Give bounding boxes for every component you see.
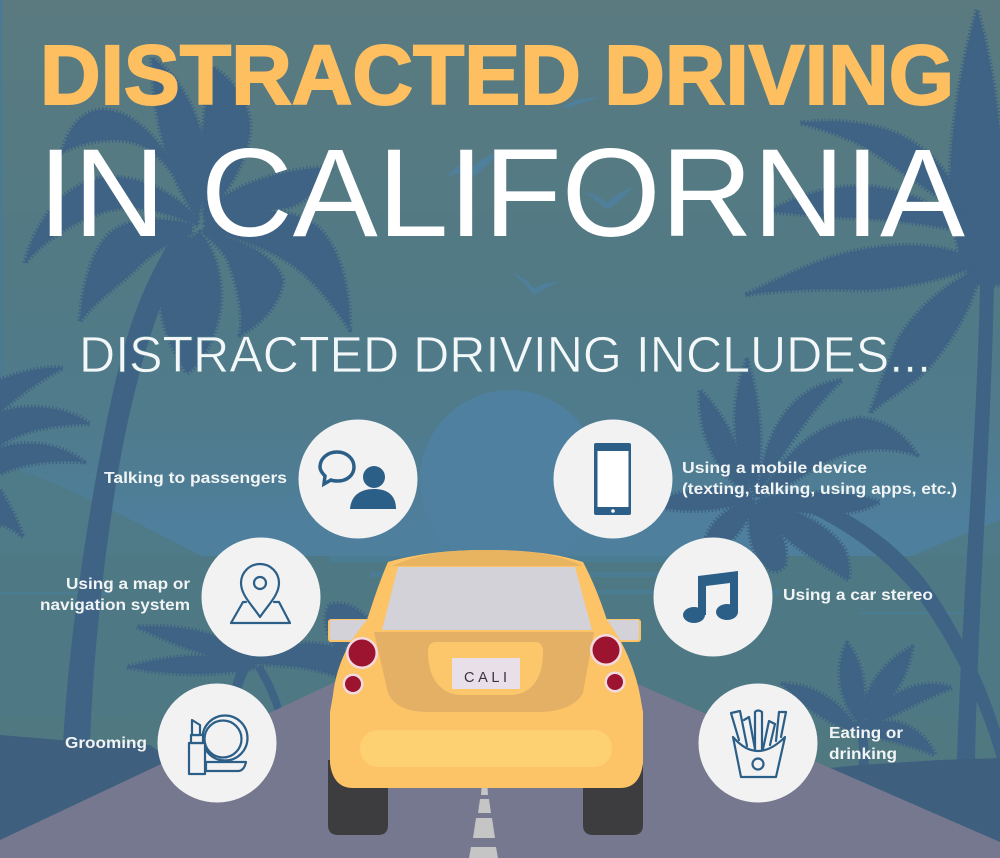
- sea: [0, 556, 1000, 716]
- palm tree: far left: [0, 368, 90, 537]
- subtitle: DISTRACTED DRIVING INCLUDES...: [79, 326, 931, 383]
- left edge stripe: [0, 0, 3, 400]
- wheels: [328, 760, 643, 835]
- icon: phone: [594, 443, 631, 515]
- label: drinking: [829, 746, 897, 763]
- trunk panel: [374, 632, 594, 712]
- palm tree: behind car left: [127, 626, 345, 712]
- disc: [654, 538, 772, 656]
- item: map or navigation: [40, 538, 320, 656]
- icon: speech bubble and person: [320, 452, 396, 509]
- label: Talking to passengers: [104, 470, 287, 487]
- icon: fries: [731, 710, 786, 777]
- disc: [202, 538, 320, 656]
- sun: [420, 390, 600, 570]
- item: eating or drinking: [698, 684, 903, 802]
- title line 2: IN CALIFORNIA: [38, 124, 966, 263]
- icon: lipstick and compact: [189, 716, 248, 774]
- palm tree: small right: [783, 643, 952, 770]
- label: [682, 460, 957, 498]
- item: grooming: [65, 684, 276, 802]
- bumper: [360, 730, 612, 767]
- rear window: [382, 567, 592, 630]
- label: (texting, talking, using apps, etc.): [682, 481, 957, 498]
- left mountain: [0, 465, 300, 640]
- lane markings: [469, 788, 498, 858]
- palm tree: middle right: [650, 360, 1000, 770]
- item: car stereo: [654, 538, 933, 656]
- label: navigation system: [40, 597, 190, 614]
- right mountain: [840, 520, 1000, 600]
- road: [0, 682, 1000, 858]
- label: Grooming: [65, 735, 147, 752]
- icon: map pin: [231, 564, 290, 623]
- palm tree: large left: [25, 58, 350, 745]
- label: [40, 576, 190, 614]
- disc: [554, 420, 672, 538]
- palm tree: tall right: [745, 10, 1000, 760]
- ground right: [810, 758, 1000, 850]
- title line 1: DISTRACTED DRIVING: [40, 28, 954, 122]
- icon: music notes: [683, 571, 738, 623]
- label: [829, 725, 903, 763]
- birds: [447, 98, 633, 295]
- car body: [330, 550, 643, 788]
- label: Using a map or: [66, 576, 190, 593]
- disc: [158, 684, 276, 802]
- license plate: CALI: [464, 670, 507, 686]
- car: [328, 550, 643, 835]
- side mirrors: [328, 619, 641, 642]
- item: talking to passengers: [104, 420, 418, 538]
- tail lights: [342, 634, 626, 694]
- disc: [298, 420, 418, 538]
- item: mobile device: [554, 420, 957, 538]
- label: Using a mobile device: [682, 460, 867, 477]
- label: Eating or: [829, 725, 903, 742]
- ground left: [0, 735, 170, 858]
- palm tree: behind car right side: [326, 604, 375, 650]
- label: Using a car stereo: [783, 587, 933, 604]
- disc: [698, 684, 818, 802]
- plate recess: [428, 642, 543, 695]
- roof: [392, 550, 583, 566]
- license plate: [452, 658, 520, 689]
